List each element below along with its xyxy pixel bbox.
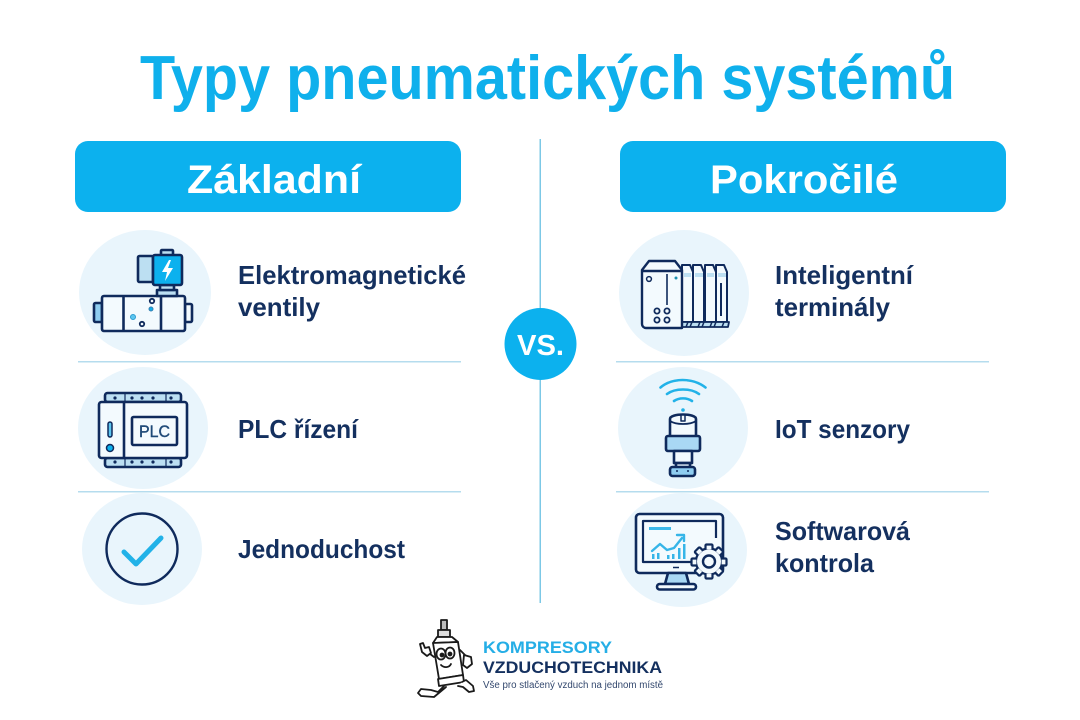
vs badge [504, 308, 576, 380]
icon: check mark [82, 493, 202, 605]
icon: smart terminal [619, 230, 749, 356]
row dividers [78, 361, 989, 492]
icon: solenoid valve [79, 230, 211, 355]
icon: PLC [78, 367, 208, 489]
icon: PLC: PLC [139, 422, 170, 441]
logo: wordmark: KOMPRESORY [483, 638, 613, 657]
heading: Základní: Základní [187, 158, 363, 202]
logo: mascot [418, 620, 474, 697]
label: Jednoduchost: Jednoduchost [238, 534, 405, 564]
heading: Pokročilé [620, 141, 1006, 212]
icon: monitor with gear [617, 493, 747, 607]
label: Inteligentní terminály: terminály [775, 292, 891, 322]
title: Typy pneumatických systémů [140, 44, 955, 113]
logo: wordmark: VZDUCHOTECHNIKA [483, 658, 662, 677]
label: Elektromagnetické ventily: ventily [238, 292, 321, 322]
logo: wordmark: Vše pro stlačený vzduch na jednom místě [483, 680, 663, 691]
heading: Pokročilé: Pokročilé [710, 158, 898, 202]
label: IoT senzory: IoT senzory [775, 414, 910, 444]
center divider [540, 139, 541, 603]
label: Softwarová kontrola [775, 516, 911, 578]
label: Softwarová kontrola: Softwarová [775, 516, 911, 546]
heading: Základní [75, 141, 461, 212]
label: Inteligentní terminály [775, 260, 914, 322]
logo: wordmark [483, 638, 663, 691]
label: Softwarová kontrola: kontrola [775, 548, 875, 578]
label: Elektromagnetické ventily [238, 260, 466, 322]
label: Inteligentní terminály: Inteligentní [775, 260, 914, 290]
label: PLC řízení: PLC řízení [238, 414, 359, 444]
vs badge: VS. [517, 330, 564, 362]
label: Elektromagnetické ventily: Elektromagnetické [238, 260, 466, 290]
icon: IoT sensor [618, 367, 748, 489]
